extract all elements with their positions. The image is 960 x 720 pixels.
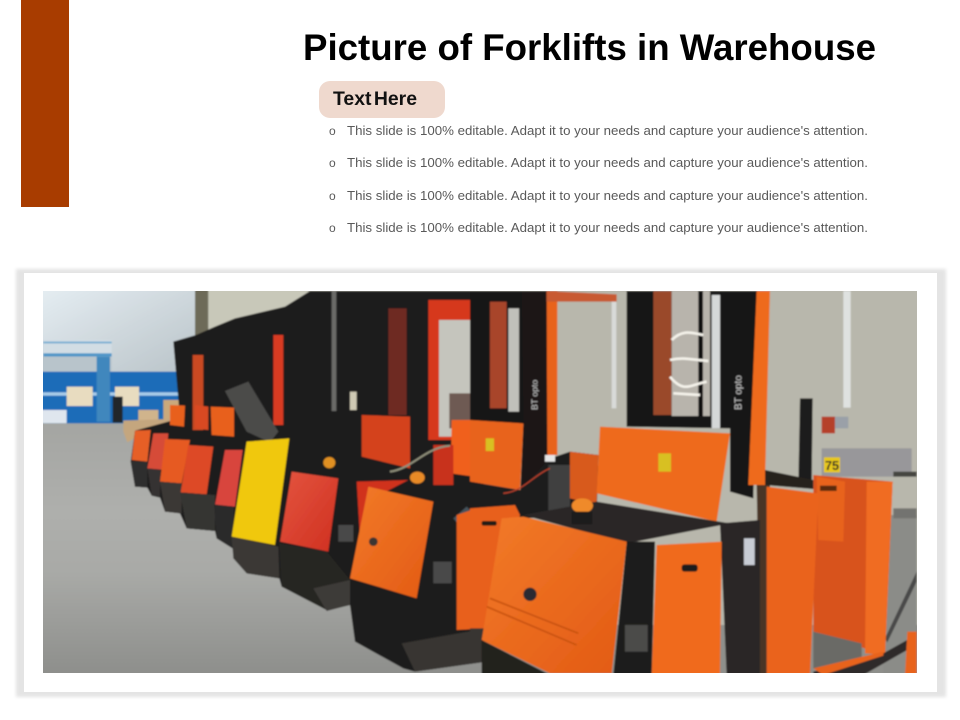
bullet list: This slide is 100% editable. Adapt it to your needs and capture your audience's attention.	[347, 220, 868, 235]
right part of photo	[470, 285, 923, 675]
photo frame	[16, 269, 946, 697]
accent bar	[21, 0, 69, 207]
subheading pill	[319, 81, 445, 118]
bullet list: This slide is 100% editable. Adapt it to your needs and capture your audience's attention.	[347, 123, 868, 138]
right part of photo: BT opto	[529, 380, 539, 410]
bullet list: o	[329, 124, 336, 138]
right part of photo: BT opto	[734, 375, 745, 410]
bullet list: This slide is 100% editable. Adapt it to your needs and capture your audience's attention.	[347, 188, 868, 203]
right part of photo: 75	[825, 459, 839, 473]
bullet list: o	[329, 189, 336, 203]
subheading pill: Text Here	[333, 89, 417, 110]
left part of photo	[40, 285, 487, 675]
title: Picture of Forklifts in Warehouse	[303, 27, 876, 68]
bullet list	[329, 123, 868, 235]
bullet list: o	[329, 156, 336, 170]
bullet list: o	[329, 221, 336, 235]
photo: forklifts in warehouse	[40, 285, 923, 675]
bullet list: This slide is 100% editable. Adapt it to your needs and capture your audience's attention.	[347, 155, 868, 170]
